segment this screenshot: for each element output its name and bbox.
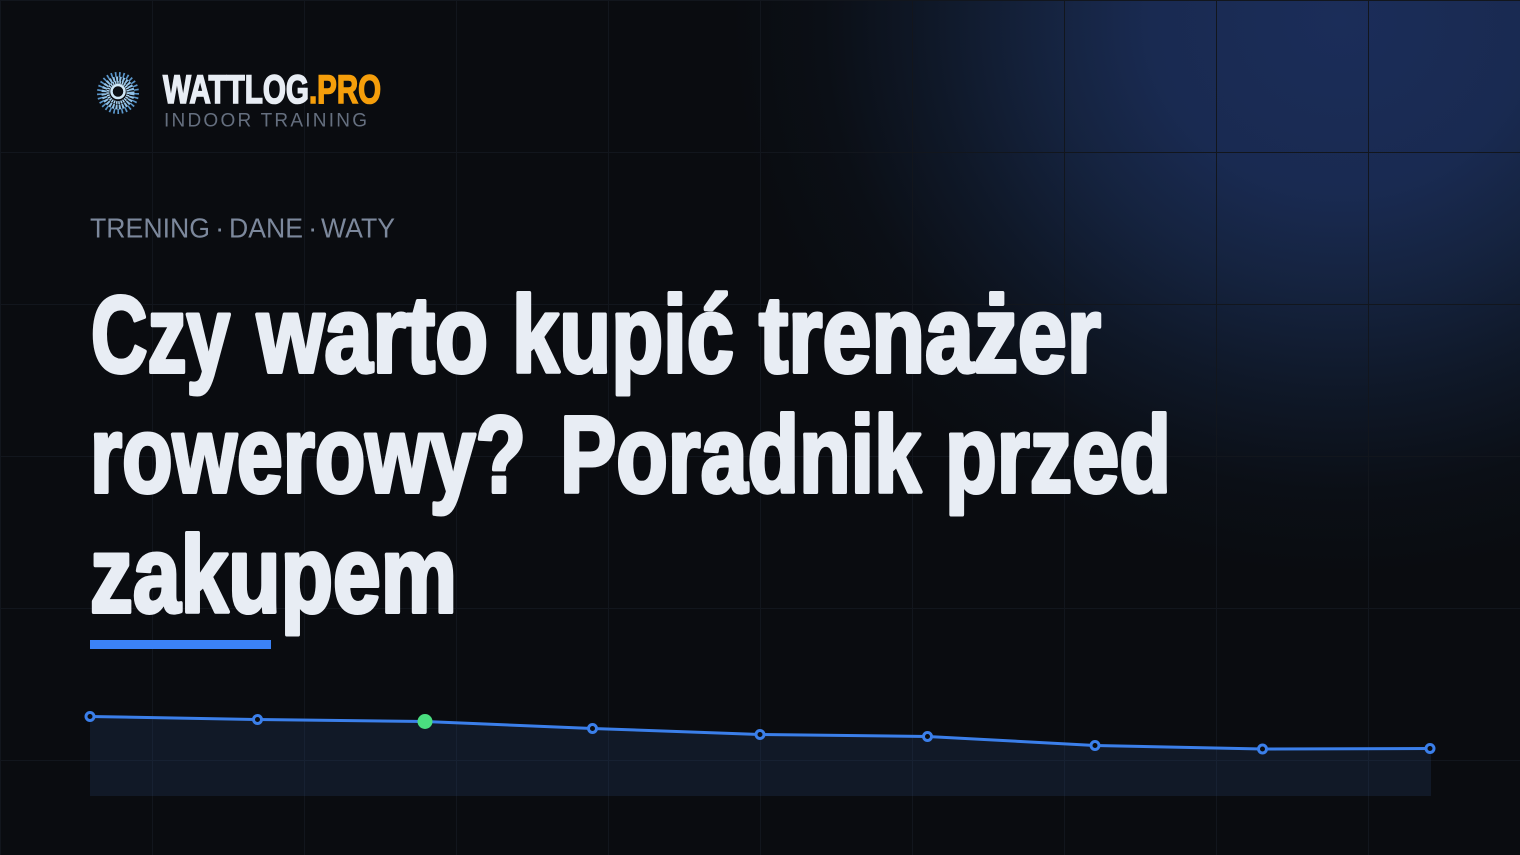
chart area (90, 716, 1431, 796)
eyebrow text: · (308, 212, 317, 244)
eyebrow text: DANE (229, 212, 303, 244)
eyebrow text: TRENING (90, 212, 210, 244)
logo wordmark: WATTLOG (163, 68, 309, 112)
line chart (86, 712, 1434, 796)
title: trenażer (759, 274, 1101, 395)
title: zakupem (90, 514, 457, 635)
highlighted point (418, 714, 432, 729)
logo tagline: INDOOR TRAINING (164, 110, 367, 132)
logo (100, 68, 381, 132)
chart points (86, 712, 1434, 753)
eyebrow text: · (215, 212, 224, 244)
title: Czy (91, 274, 230, 395)
title: kupić (512, 274, 734, 395)
title: warto (256, 274, 488, 395)
title (90, 274, 1171, 635)
logo wordmark suffix: .PRO (309, 68, 381, 112)
title: rowerowy? (90, 394, 526, 515)
title: przed (945, 394, 1171, 515)
title underline (90, 640, 271, 649)
title: Poradnik (560, 394, 921, 515)
eyebrow text (90, 212, 395, 244)
eyebrow text: WATY (321, 212, 395, 244)
chart line (90, 716, 1430, 749)
icon: cassette cog (100, 74, 136, 112)
